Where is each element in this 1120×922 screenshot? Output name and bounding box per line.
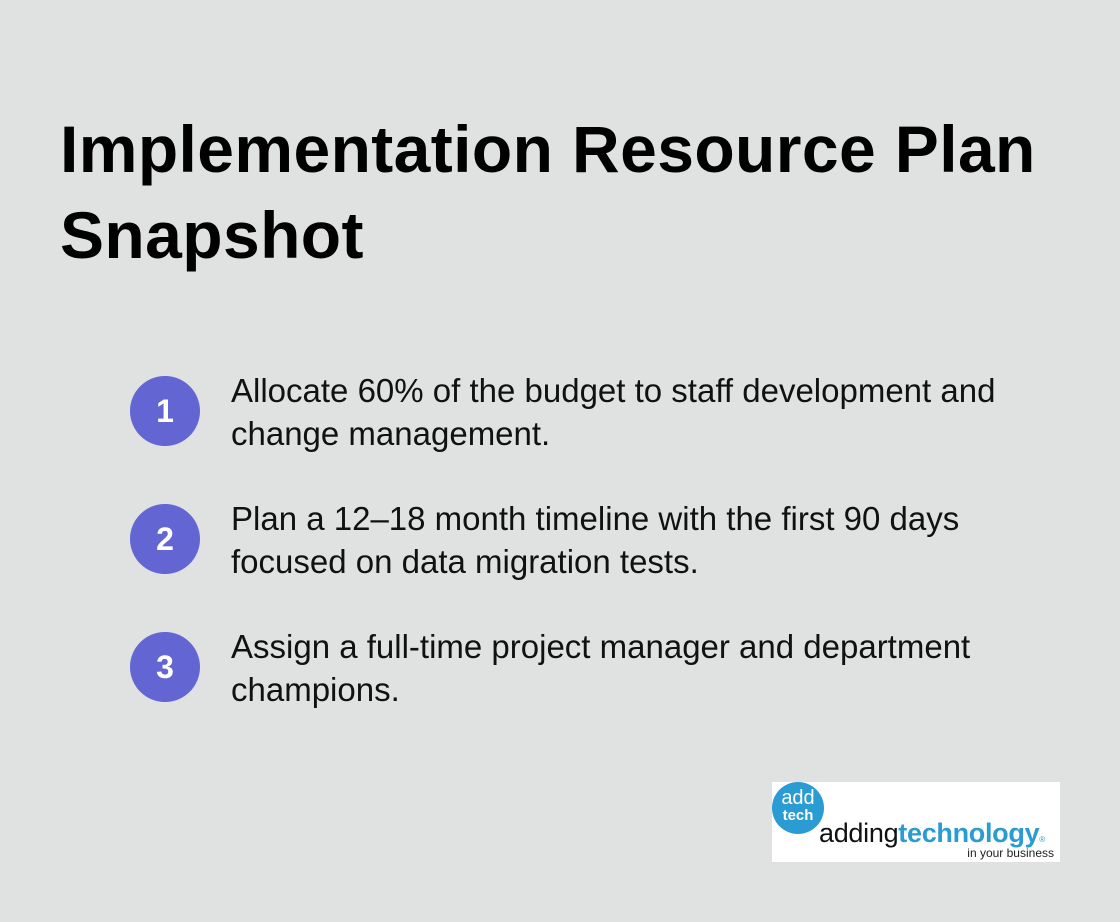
logo wordmark: addingtechnology®: [819, 818, 1045, 848]
text 2: Plan a 12–18 month timeline with the first 90 days focused on data migration tests.: [231, 500, 959, 580]
badge 3: [130, 632, 200, 702]
item 2: [130, 500, 959, 580]
tagline: in your business: [967, 846, 1054, 860]
text 3: Assign a full-time project manager and department champions.: [231, 628, 970, 708]
title: Implementation Resource Plan: [60, 112, 1036, 186]
item 1: [130, 372, 995, 452]
badge 1: [130, 376, 200, 446]
badge 2: 2: [156, 521, 174, 557]
logo circle: tech: [783, 807, 813, 824]
text 1: Allocate 60% of the budget to staff development and change management.: [231, 372, 995, 452]
title: [60, 112, 1036, 272]
logo circle: add: [781, 787, 815, 809]
item 3: [130, 628, 970, 708]
logo circle: [772, 782, 824, 834]
badge 3: 3: [156, 649, 174, 685]
logo: [772, 782, 1060, 862]
title: Snapshot: [60, 198, 364, 272]
badge 1: 1: [156, 393, 174, 429]
badge 2: [130, 504, 200, 574]
